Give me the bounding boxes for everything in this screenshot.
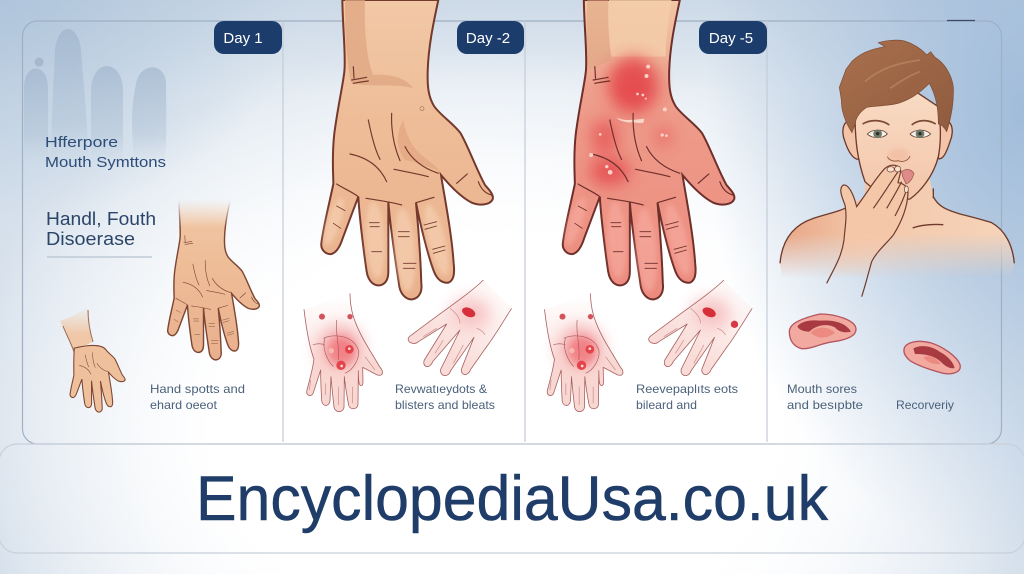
illustration: healthy hand medium bbox=[168, 200, 259, 360]
main timeline panel frame bbox=[22, 21, 1002, 444]
illustration: large hand day 5 with rash bbox=[561, 0, 734, 299]
illustration: mouth sore left bbox=[789, 314, 856, 349]
day -5 badge: Day -5 bbox=[709, 30, 753, 47]
illustration: mouth sore right bbox=[904, 341, 960, 374]
heading: disease name bbox=[46, 209, 156, 249]
caption: day 5: bileard and bbox=[636, 398, 697, 412]
illustration: healthy hand small bbox=[60, 307, 125, 412]
day 1 badge bbox=[214, 21, 282, 54]
panel: day 1 bbox=[24, 21, 282, 412]
caption: day 2: Revwatıeydots & bbox=[395, 382, 487, 396]
heading: disease name: Handl, Fouth bbox=[46, 209, 156, 229]
caption: day 1: ehard oeeot bbox=[150, 398, 218, 412]
caption: day 1: Hand spotts and bbox=[150, 382, 245, 396]
heading: symptoms: Hfferpore bbox=[45, 135, 118, 151]
icon: ghost fingers bbox=[24, 29, 166, 165]
illustration: rash hand fingers day 5 bbox=[649, 280, 752, 376]
caption: recovery: Recorveriy bbox=[896, 398, 954, 412]
caption: mouth sores: and besıpbte bbox=[787, 398, 863, 412]
brand footer frame bbox=[0, 444, 1024, 553]
heading: symptoms: Mouth Symttons bbox=[45, 155, 166, 171]
day -2 badge bbox=[457, 21, 524, 54]
illustration: rash hand back day 5 bbox=[544, 293, 623, 412]
illustration: large hand day 2 bbox=[320, 0, 493, 299]
caption: mouth sores: Mouth sores bbox=[787, 382, 857, 396]
caption: day 5: Reevepaplıts eots bbox=[636, 382, 738, 396]
caption: day 2: blisters and bleats bbox=[395, 398, 495, 412]
heading: symptoms bbox=[45, 135, 166, 171]
brand title: EncyclopediaUsa.co.uk bbox=[196, 464, 828, 534]
day -5 badge bbox=[699, 21, 767, 54]
caption: day 1 bbox=[150, 382, 245, 412]
panel: mouth and recovery bbox=[780, 40, 1014, 412]
caption: day 5 bbox=[636, 382, 738, 412]
illustration: rash hand fingers day 2 bbox=[408, 280, 512, 376]
caption: mouth sores bbox=[787, 382, 863, 412]
panel: day 2 bbox=[304, 0, 524, 412]
heading: disease name: Disoerase bbox=[46, 229, 135, 249]
illustration: rash hand back day 2 bbox=[304, 293, 382, 412]
day 1 badge: Day 1 bbox=[223, 30, 263, 47]
illustration: child covering mouth bbox=[780, 40, 1014, 297]
day -2 badge: Day -2 bbox=[466, 30, 510, 47]
caption: day 2 bbox=[395, 382, 495, 412]
panel: day 5 bbox=[544, 0, 767, 412]
